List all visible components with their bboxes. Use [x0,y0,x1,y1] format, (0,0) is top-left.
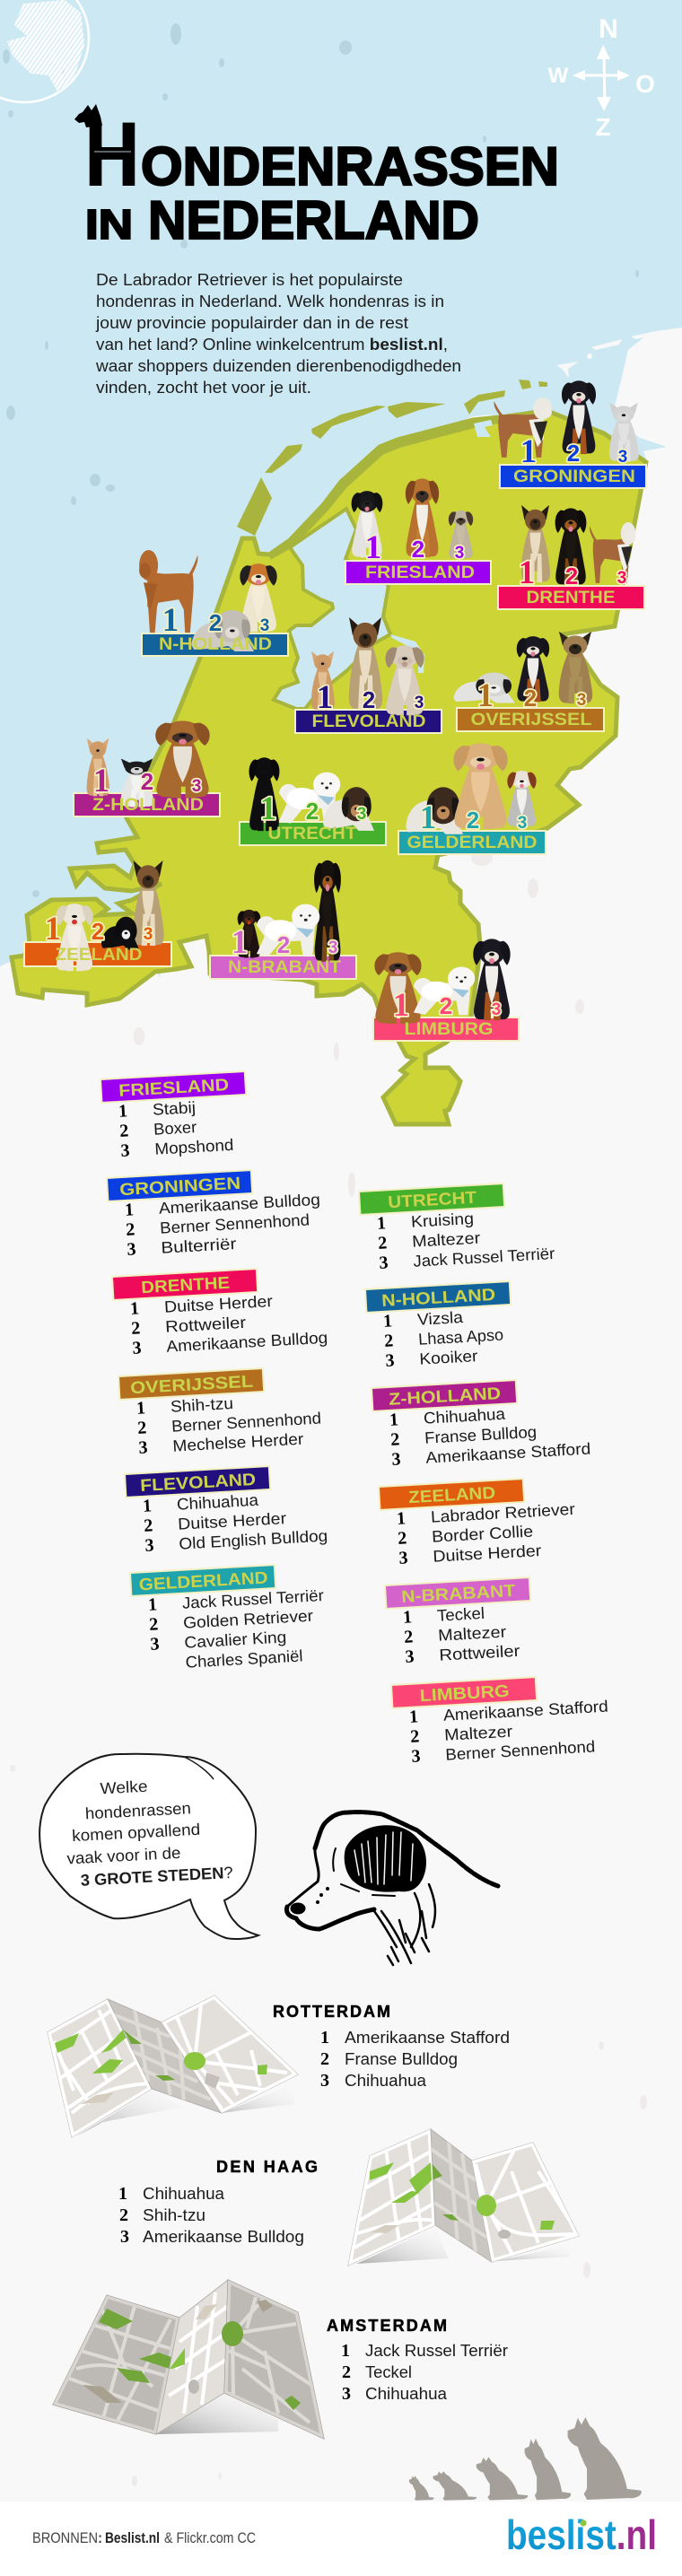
list: Flevoland: 2 [144,1515,153,1536]
city ranking: Rotterdam: 3 [320,2071,329,2091]
rank numbers: Utrecht [260,790,366,827]
rank numbers: Flevoland [317,679,424,716]
list: N-Holland [365,1281,514,1372]
list: Zeeland: 1 [396,1508,407,1529]
intro text: van het land? Online winkelcentrum beslist.nl, [96,336,448,354]
list: Flevoland: Duitse Herder [178,1509,287,1533]
list: Drenthe: 3 [132,1338,142,1358]
list: Limburg: Amerikaanse Stafford [442,1698,608,1725]
label text: Utrecht: UTRECHT [267,825,357,843]
dogs: Gelderland [406,743,537,834]
label box: N-Brabant [210,956,356,979]
label box: Friesland [345,561,491,584]
map icon: Den Haag [348,2129,579,2266]
label text: Zeeland: ZEELAND [56,946,142,965]
list: N-Holland: Kooiker [419,1347,478,1368]
footer band [0,2502,682,2576]
map: IJsselmeer [274,509,390,709]
dogs: Friesland [352,478,473,558]
label box: N-Holland [142,633,288,656]
city heading: Den Haag: DEN HAAG [216,2158,318,2176]
list: Gelderland: 1 [147,1594,158,1615]
dogs: Overijssel [453,632,592,703]
dogs: Utrecht [249,757,374,831]
icon: dog head on H [74,104,102,127]
rank numbers: N-Holland: 1 [162,602,179,639]
dogs: N-Holland [139,550,277,651]
list: N-Brabant: Maltezer [438,1623,507,1645]
list: Overijssel: 2 [137,1418,147,1438]
list: Utrecht: 3 [379,1253,389,1273]
list: Gelderland [130,1562,328,1674]
rank numbers: Overijssel: 2 [524,685,537,712]
footer sources: Beslist.nl [105,2529,160,2546]
dogs: Drenthe [521,505,635,585]
list: Zeeland: Duitse Herder [433,1541,542,1566]
icon: compass: O [635,70,655,98]
city ranking: Rotterdam: Franse Bulldog [345,2050,458,2068]
list: Limburg: Maltezer [444,1723,513,1744]
label text: N-Brabant: N-BRABANT [228,958,341,977]
list: Friesland: 3 [120,1140,130,1161]
list: Groningen [107,1166,323,1261]
intro text: hondenras in Nederland. Welk hondenras is in [96,293,444,310]
intro text: jouw provincie populairder dan in de rest [95,314,408,332]
list: N-Holland: Lhasa Apso [418,1325,504,1349]
label text: Z-Holland: Z-HOLLAND [92,796,204,815]
rank numbers: N-Brabant: 1 [232,924,248,961]
icon: compass: Z [595,113,611,141]
speech bubble: 3 GROTE STEDEN? [80,1864,233,1890]
list: Drenthe: Duitse Herder [163,1292,273,1316]
label box: Utrecht [240,822,386,845]
rank numbers: Groningen [520,433,627,470]
list: Flevoland: 3 [144,1535,154,1556]
icon: compass: W [548,64,569,88]
list: N-Holland: Vizsla [416,1308,464,1329]
list: Friesland: 2 [119,1121,129,1141]
illustration: dog head sketch [286,1812,498,1965]
list: Utrecht: UTRECHT [388,1189,477,1212]
list: N-Brabant: Rottweiler [439,1642,520,1664]
city ranking: Den Haag [118,2184,304,2247]
intro text [95,271,461,397]
rank numbers: Zeeland: 3 [144,925,153,944]
sea speckles [3,23,639,897]
speech bubble [39,1754,258,1939]
list: Groningen: 2 [126,1219,136,1240]
list: Z-Holland: 3 [391,1449,401,1470]
list: Drenthe: 2 [131,1318,141,1339]
label text: Groningen: GRONINGEN [513,467,635,486]
list: Friesland: FRIESLAND [118,1076,230,1101]
list: Overijssel: Berner Sennenhond [171,1409,322,1436]
footer sources: & Flickr.com CC [164,2529,256,2546]
intro text: De Labrador Retriever is het populairste [96,271,403,289]
list: Limburg: 3 [411,1746,421,1767]
rank numbers: N-Holland: 3 [260,616,269,635]
panel: N-Brabant [210,860,356,979]
panel: Gelderland [398,743,546,854]
list: Overijssel: OVERIJSSEL [130,1373,254,1398]
label text: Drenthe: DRENTHE [526,589,616,607]
label box: Limburg [373,1017,519,1041]
label box: Z-Holland [74,793,220,816]
list: N-Holland: N-HOLLAND [381,1286,496,1311]
city ranking: Amsterdam: Teckel [365,2363,412,2381]
city ranking: Den Haag: Chihuahua [143,2185,225,2203]
panel: Limburg [373,939,519,1041]
city ranking: Rotterdam: Chihuahua [345,2072,427,2090]
panel: Flevoland [295,617,442,733]
list: Flevoland: 1 [142,1496,153,1516]
rank numbers: N-Holland: 2 [209,609,222,636]
rank numbers: Friesland: 2 [412,536,424,563]
map: Ketelmeer [390,634,424,673]
rank numbers: Friesland: 1 [365,529,381,566]
label box: Flevoland [295,710,442,733]
speech bubble: Welke [100,1777,148,1797]
list: Drenthe: 1 [129,1298,140,1319]
list: Flevoland: Old English Bulldog [179,1526,328,1553]
list: Zeeland: 3 [398,1548,408,1568]
rank numbers: Gelderland: 1 [420,799,436,836]
list: Zeeland: ZEELAND [408,1484,496,1507]
label text: Overijssel: OVERIJSSEL [470,711,592,729]
rank numbers: Groningen: 2 [567,440,580,467]
rank numbers: Utrecht: 2 [306,798,319,825]
rank numbers: Gelderland: 2 [467,807,479,834]
rank numbers: Overijssel [477,677,586,714]
list: N-Holland: 1 [382,1311,393,1332]
map: mainland [12,411,646,1124]
dogs: N-Brabant [238,860,341,962]
list: Utrecht: Jack Russel Terriër [413,1244,555,1271]
rank numbers: N-Brabant [232,924,337,961]
city ranking: Den Haag: 1 [118,2184,127,2204]
city ranking: Den Haag: Amerikaanse Bulldog [143,2228,304,2246]
list: Utrecht: 1 [376,1213,387,1234]
rank numbers: Drenthe [519,554,626,591]
rank numbers: Zeeland [45,911,153,947]
list: Drenthe [112,1265,328,1359]
city heading: Amsterdam: AMSTERDAM [327,2317,447,2335]
list: N-Brabant [385,1577,534,1668]
list: Limburg: Berner Sennenhond [445,1737,596,1764]
speech bubble: vaak voor in de [66,1844,181,1868]
panel: Zeeland [24,860,171,971]
list: N-Brabant: 3 [405,1646,415,1667]
list: Z-Holland: Z-HOLLAND [389,1384,502,1410]
city ranking: Rotterdam: 2 [320,2049,329,2069]
footer sources [32,2529,256,2546]
list: Overijssel: 1 [136,1398,146,1419]
list: Limburg: 2 [410,1726,420,1747]
title: ONDENRASSEN [141,136,559,196]
logo: beslist.nl: beslist.nl [506,2511,657,2558]
city: Amsterdam [53,2280,508,2439]
rank numbers: Friesland: 3 [455,544,464,563]
city heading: Rotterdam: ROTTERDAM [273,2003,390,2021]
label text: Flevoland: FLEVOLAND [312,712,425,731]
list: Z-Holland: Amerikaanse Stafford [425,1439,591,1467]
list: Z-Holland: 1 [389,1410,399,1430]
list: Groningen: Bulterriër [161,1235,237,1257]
city ranking: Den Haag: 2 [119,2205,128,2225]
dogs: Flevoland [311,617,424,715]
speech bubble: komen opvallend [72,1821,201,1845]
city ranking: Den Haag: 3 [120,2227,129,2247]
rank numbers: Utrecht: 3 [357,805,366,824]
list: Friesland: Boxer [153,1118,197,1139]
list: Z-Holland: 2 [390,1429,400,1450]
city ranking: Amsterdam: 3 [342,2384,351,2404]
title: H [85,104,139,204]
rank numbers: N-Brabant: 3 [328,939,337,957]
list: Groningen: 1 [124,1200,135,1220]
map: north coast band [269,413,538,556]
map icon: Amsterdam [53,2280,324,2439]
list: Friesland: 1 [118,1101,128,1122]
city ranking: Amsterdam: 1 [341,2341,350,2361]
rank numbers: Zeeland: 2 [92,918,104,945]
list: Friesland: Stabij [152,1098,196,1119]
list: Zeeland [379,1476,578,1569]
list: Overijssel: 3 [138,1437,148,1458]
white coastal streaks [413,330,661,441]
rank numbers: Drenthe: 2 [565,563,578,589]
panel: Friesland [345,478,491,584]
panel: Z-Holland [74,720,220,816]
city ranking: Den Haag: Shih-tzu [143,2206,205,2224]
list: Limburg: 1 [408,1707,419,1727]
list: Gelderland: Golden Retriever [183,1607,314,1632]
list: Utrecht: Maltezer [412,1229,481,1251]
list: Utrecht [359,1181,555,1274]
list: Limburg: LIMBURG [419,1682,510,1706]
icon: compass: N [599,14,618,44]
rank numbers: Flevoland: 1 [317,679,333,716]
rank numbers: Drenthe: 3 [617,569,626,588]
list: Groningen: Berner Sennenhond [160,1210,310,1237]
dogs: Z-Holland [87,720,210,807]
rank numbers: Gelderland [420,799,527,836]
list: Friesland [101,1071,249,1162]
rank numbers: Overijssel: 3 [577,691,586,710]
dog silhouettes [409,2417,642,2501]
rank numbers: Gelderland: 3 [518,814,527,833]
intro text: waar shoppers duizenden dierenbenodigdheden [95,357,461,375]
city ranking: Rotterdam [320,2028,510,2091]
list: Gelderland: GELDERLAND [138,1568,268,1594]
list: Zeeland: Border Collie [432,1522,534,1546]
rank numbers: Groningen: 3 [618,448,627,467]
label box: Overijssel [457,708,604,731]
icon: compass [548,14,655,141]
map: Lauwersmeer [474,420,493,437]
list: Overijssel: Mechelse Herder [172,1430,304,1455]
label box: Gelderland [398,831,546,854]
map: Wadden islands [237,380,547,536]
city: Rotterdam [48,1995,510,2137]
rank numbers: Friesland [365,529,464,566]
list: Overijssel: Shih-tzu [170,1394,233,1416]
list: Flevoland [125,1463,328,1557]
list: Drenthe: Rottweiler [165,1314,247,1336]
list: Groningen: Amerikaanse Bulldog [158,1191,320,1218]
city ranking: Amsterdam: Chihuahua [365,2385,448,2403]
rank numbers: Z-Holland: 1 [93,763,109,799]
title [74,104,559,250]
list: Groningen: GRONINGEN [119,1174,241,1200]
rank numbers: N-Brabant: 2 [277,931,290,958]
intro text: vinden, zocht het voor je uit. [96,379,311,397]
list: Gelderland: 2 [149,1614,159,1635]
list: Z-Holland [372,1376,591,1471]
panel: Utrecht [240,757,386,845]
label text: Friesland: FRIESLAND [365,563,475,582]
list: Gelderland: Jack Russel Terriër [181,1586,324,1612]
list: Groningen: 3 [127,1239,136,1260]
list: Zeeland: 2 [398,1528,407,1549]
label text: N-Holland: N-HOLLAND [159,635,272,654]
rank numbers: Groningen: 1 [520,433,537,470]
speech bubble: hondenrassen [84,1799,191,1822]
city ranking: Rotterdam: Amerikaanse Stafford [345,2029,510,2047]
rank numbers: Overijssel: 1 [477,677,494,714]
list: Z-Holland: Chihuahua [423,1405,506,1428]
panel: Groningen [494,380,646,488]
list: N-Brabant: 1 [402,1607,413,1628]
list: N-Holland: 3 [385,1350,395,1371]
list: Gelderland: Cavalier King [184,1628,287,1652]
label text: Limburg: LIMBURG [404,1020,494,1039]
rank numbers: Flevoland: 3 [415,694,424,712]
rank numbers: Limburg: 2 [440,992,452,1019]
list: N-Holland: 2 [384,1331,394,1351]
city ranking: Amsterdam: Jack Russel Terriër [365,2342,508,2360]
label text: Gelderland: GELDERLAND [407,834,537,852]
background: sea [0,0,682,978]
dogs: Limburg [374,939,511,1024]
dogs: Zeeland [56,860,164,971]
rank numbers: Z-Holland [93,763,201,799]
list: Friesland: Mopshond [154,1136,234,1158]
label box: Zeeland [24,942,171,966]
rank numbers: Z-Holland: 3 [192,777,201,796]
rank numbers: Limburg: 3 [492,1000,501,1019]
city ranking: Rotterdam: 1 [320,2028,329,2048]
rank numbers: Utrecht: 1 [260,790,276,827]
dogs: Groningen [494,380,639,461]
label box: Drenthe [498,586,644,609]
title: IN [85,201,133,248]
panel: N-Holland [139,550,288,656]
rank numbers: Drenthe: 1 [519,554,535,591]
icon: globe [0,0,89,102]
city: Den Haag [118,2129,579,2266]
rank numbers: Zeeland: 1 [45,911,61,947]
list: Utrecht: 2 [378,1233,388,1253]
list: Drenthe: Amerikaanse Bulldog [166,1329,328,1356]
list: Gelderland: Charles Spaniël [185,1646,303,1672]
list: Overijssel [118,1366,323,1459]
title: NEDERLAND [148,190,479,250]
list: Limburg [391,1673,611,1768]
label box: Groningen [500,465,646,488]
list: Gelderland: 3 [150,1634,160,1655]
list: Utrecht: Kruising [410,1209,474,1231]
list: Flevoland: Chihuahua [176,1491,259,1514]
list: N-Brabant: N-BRABANT [401,1582,516,1607]
list: N-Brabant: Teckel [436,1604,485,1625]
rank numbers: Limburg: 1 [393,987,409,1024]
paper speckles [10,850,647,2486]
list: Zeeland: Labrador Retriever [430,1500,575,1526]
city ranking: Amsterdam: 2 [342,2362,351,2382]
footer sources: BRONNEN: [32,2529,102,2546]
panel: Overijssel [453,632,604,731]
map: Netherlands [12,380,646,1124]
rank numbers: Flevoland: 2 [363,686,375,713]
rank numbers: Limburg [393,987,501,1024]
list: Drenthe: DRENTHE [141,1274,231,1297]
list: Flevoland: FLEVOLAND [140,1471,257,1496]
list: Z-Holland: Franse Bulldog [424,1423,538,1447]
rank numbers: Z-Holland: 2 [141,768,153,795]
map icon: Rotterdam [48,1995,298,2137]
list: N-Brabant: 2 [404,1627,414,1647]
panel: Drenthe [498,505,644,609]
city ranking: Amsterdam [341,2341,508,2404]
rank numbers: N-Holland [162,602,269,639]
